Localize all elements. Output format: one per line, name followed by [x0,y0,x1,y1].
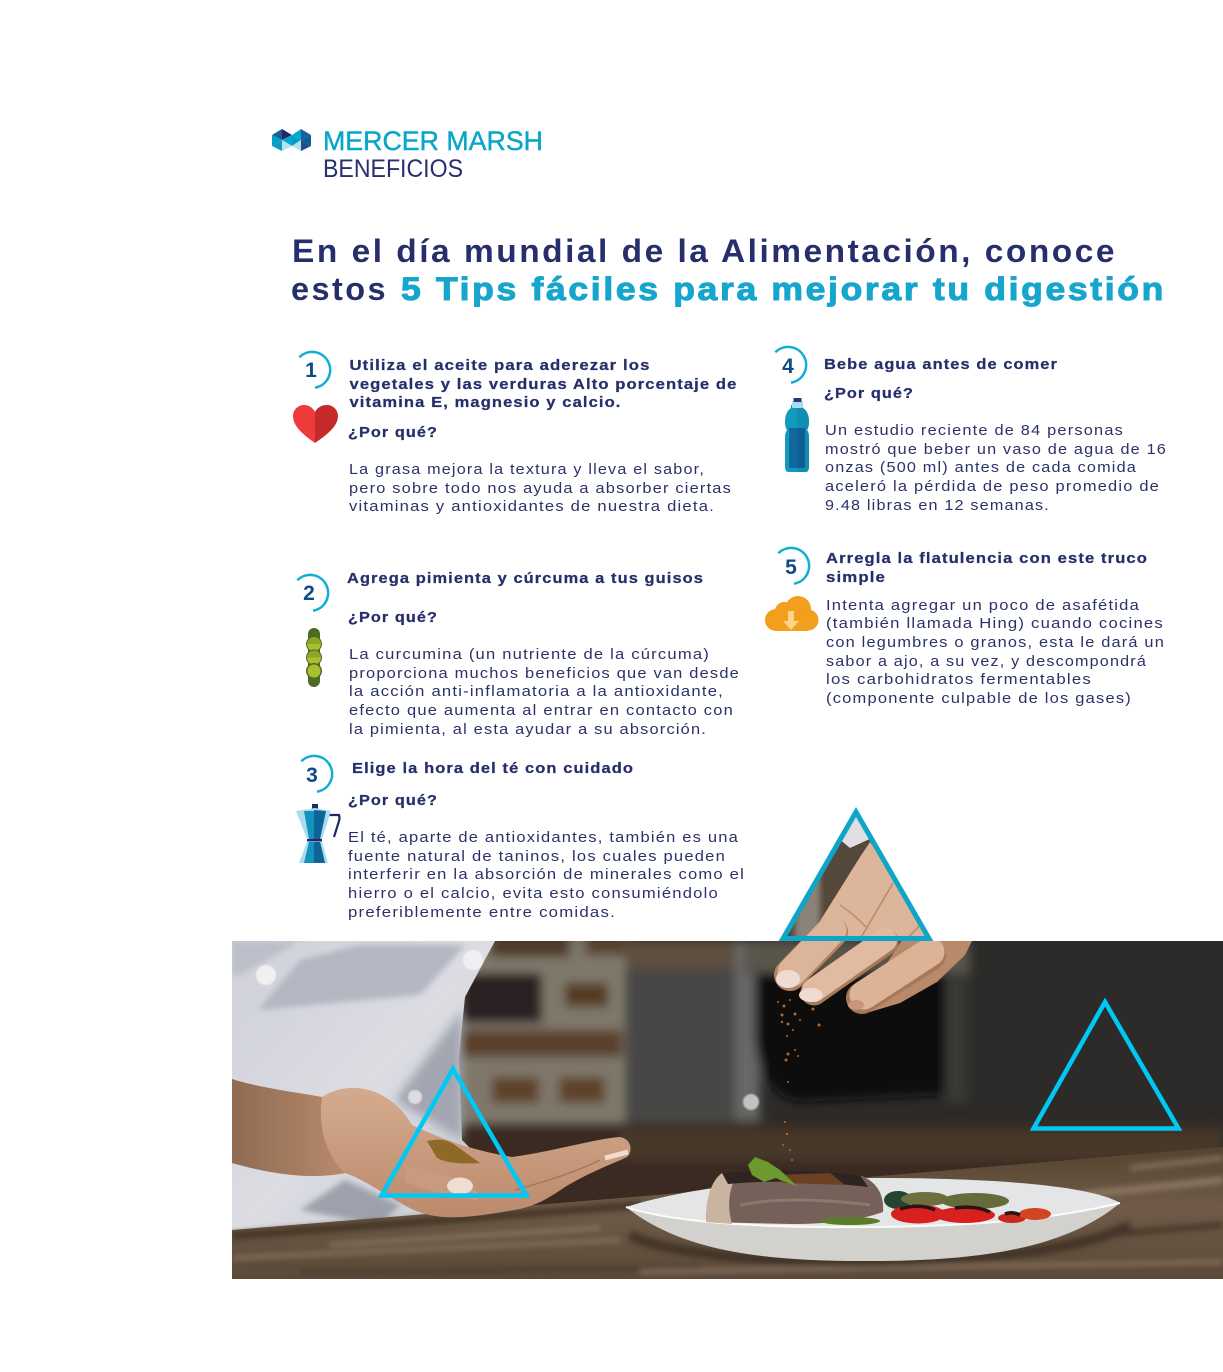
tip 4: agua [775,347,1167,514]
blurred kitchen background [455,935,1223,1213]
vegetables [820,1191,1051,1225]
heading: Utiliza el aceite para aderezar los [350,357,650,374]
body text: mostró que beber un vaso de agua de 16 [825,441,1167,458]
body text: pero sobre todo nos ayuda a absorber ciertas [349,480,732,497]
tip 3: te: Elige la hora del té con cuidado [352,760,634,777]
tip 1: aceite [293,352,738,515]
heading [350,357,738,411]
title: estos [291,271,388,307]
tip 1: aceite: ¿Por qué? [348,424,438,441]
body text: La grasa mejora la textura y lleva el sabor, [349,461,705,478]
body text: (también llamada Hing) cuando cocines [826,615,1164,632]
number 1 badge [299,352,330,388]
tip 3: te: ¿Por qué? [348,792,438,809]
body text: los carbohidratos fermentables [826,671,1092,688]
title: 5 Tips fáciles para mejorar tu digestión [401,271,1166,307]
icon: heart [293,405,338,443]
body text: con legumbres o granos, esta le dará un [826,634,1165,651]
tip 4: agua: Bebe agua antes de comer [824,356,1058,373]
photo: chef seasoning a steak [232,935,1223,1279]
icon: water bottle [785,398,809,472]
body text [348,829,745,921]
body text: preferiblemente entre comidas. [348,904,616,921]
body text [826,597,1165,707]
plate [626,1178,1120,1261]
number 4 badge: 4 [782,355,794,378]
body text: aceleró la pérdida de peso promedio de [825,478,1160,495]
icon: moka pot [296,804,340,863]
title: En el día mundial de la Alimentación, conoce [292,233,1117,269]
triangle: top frame [783,812,929,938]
body text: (componente culpable de los gases) [826,690,1132,707]
back of the hand and ring finger [848,935,975,1012]
body text: Un estudio reciente de 84 personas [825,422,1124,439]
body text: sabor a ajo, a su vez, y descompondrá [826,653,1147,670]
body text: onzas (500 ml) antes de cada comida [825,459,1137,476]
spice specks [777,999,820,1037]
number 2 badge [297,575,328,611]
heading: Arregla la flatulencia con este truco [826,550,1148,567]
body text: El té, aparte de antioxidantes, también es una [348,829,739,846]
falling spice [782,1049,799,1161]
tip 2: pimienta y curcuma: ¿Por qué? [348,609,438,626]
triangle: right frame [1034,1002,1178,1128]
number 3 badge: 3 [306,764,318,787]
body text [825,422,1167,514]
logo: Mercer Marsh Beneficios [272,126,543,183]
body text: Intenta agregar un poco de asafétida [826,597,1140,614]
left hand [232,1079,631,1217]
logo: Mercer Marsh Beneficios: MERCER MARSH [323,126,543,156]
icon: pea pod [306,628,322,687]
garnish [748,1157,798,1187]
tip 3: te [296,756,745,921]
tip 5: flatulencia [765,548,1165,707]
body text [349,646,740,738]
body text: hierro o el calcio, evita esto consumiéndolo [348,885,719,902]
top hand sprinkling spice [770,805,975,1037]
body text: efecto que aumenta al entrar en contacto con [349,702,734,719]
number 3 badge [301,756,332,792]
body text: interferir en la absorción de minerales como el [348,866,745,883]
body text [349,461,732,515]
tip 2: pimienta y curcuma [297,570,740,738]
number 4 badge [775,347,806,383]
heading: vitamina E, magnesio y calcio. [350,394,622,411]
number 5 badge: 5 [785,556,797,579]
logo: Mercer Marsh Beneficios: BENEFICIOS [323,155,463,183]
triangle window background [787,817,924,936]
steak [706,1170,883,1224]
middle finger [814,942,885,992]
body text: La curcumina (un nutriente de la cúrcuma) [349,646,710,663]
fingernails [776,970,823,1002]
heading [826,550,1148,586]
body text: proporciona muchos beneficios que van desde [349,665,740,682]
body text: vitaminas y antioxidantes de nuestra dieta. [349,498,715,515]
body text: fuente natural de taninos, los cuales pueden [348,848,726,865]
icon: cloud download [765,596,818,631]
chef jacket [232,941,495,1240]
heading: vegetales y las verduras Alto porcentaje de [350,376,738,393]
number 1 badge: 1 [305,359,317,382]
triangle: left frame [382,1069,526,1196]
heading: simple [826,569,886,586]
index finger [790,932,832,975]
tip 4: agua: ¿Por qué? [824,385,914,402]
icon: logo mark [272,129,311,151]
number 5 badge [778,548,809,584]
body text: 9.48 libras en 12 semanas. [825,497,1050,514]
table [232,1147,1223,1279]
number 2 badge: 2 [303,582,315,605]
body text: la acción anti-inflamatoria a la antioxidante, [349,683,724,700]
body text: la pimienta, al esta ayudar a su absorción. [349,721,707,738]
title [291,233,1166,307]
tip 2: pimienta y curcuma: Agrega pimienta y cúrcuma a tus guisos [347,570,704,587]
